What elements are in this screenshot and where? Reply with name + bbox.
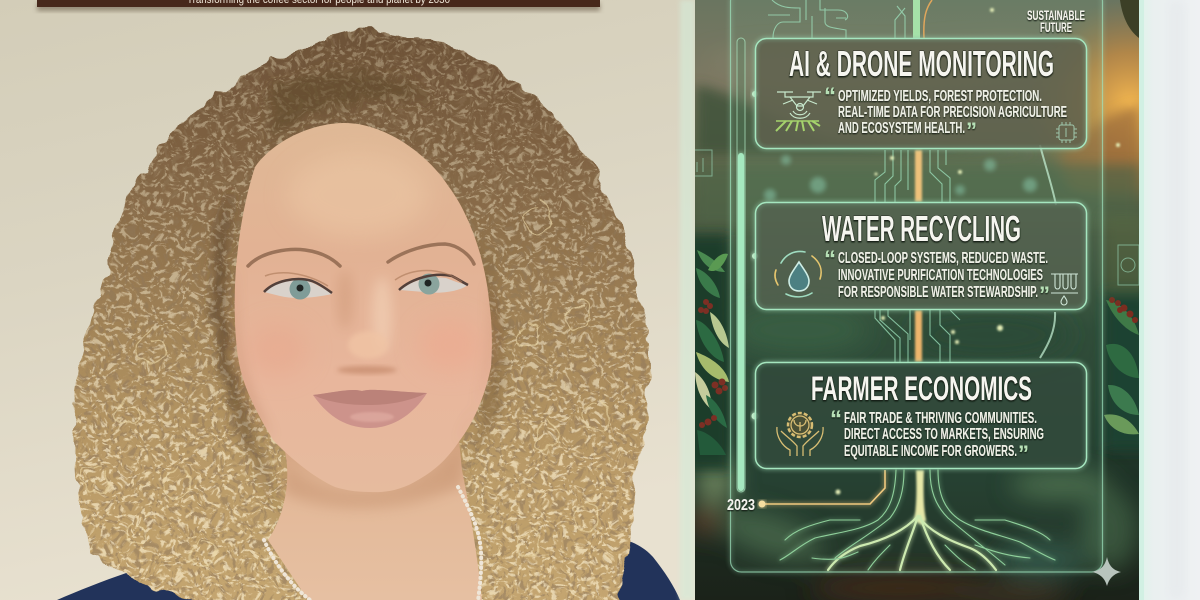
quote text: Water Recycling: “ xyxy=(824,246,836,273)
scene: dark leaf top right xyxy=(1120,0,1139,38)
quote text: AI & Drone: AND ECOSYSTEM HEALTH. xyxy=(838,120,965,137)
scene: sunset glow xyxy=(1048,10,1139,198)
scene: distant hills xyxy=(695,81,1139,204)
watermark: sparkle xyxy=(1092,557,1121,586)
scene: blurred foliage xyxy=(691,304,1138,600)
quote text: Water Recycling: CLOSED-LOOP SYSTEMS, REDUCED WASTE. xyxy=(838,250,1048,267)
quote text: Water Recycling: INNOVATIVE PURIFICATION TECHNOLOGIES xyxy=(838,267,1043,284)
icon: AI chip xyxy=(1056,122,1077,143)
quote text: Water Recycling: ” xyxy=(1039,282,1050,307)
portrait: clothing xyxy=(57,540,680,600)
quote text: Farmer Economics: DIRECT ACCESS TO MARKETS, ENSURING xyxy=(844,426,1044,443)
card: Farmer Economics xyxy=(756,362,1086,468)
scene: holographic side panels xyxy=(695,150,1139,285)
icon: drone over field xyxy=(776,92,821,131)
golden branch from 2023 xyxy=(763,470,885,504)
circuit traces xyxy=(768,0,960,362)
timeline nodes xyxy=(752,91,758,420)
glowing particles xyxy=(836,8,1120,494)
portrait: nose xyxy=(337,331,397,374)
label: Sustainable Future: FUTURE xyxy=(1040,20,1072,35)
portrait: eyebrows xyxy=(248,244,474,266)
portrait: pearl necklace xyxy=(264,487,481,600)
heading: Farmer Economics: FARMER ECONOMICS xyxy=(811,370,1032,408)
icon: water filtration xyxy=(1051,274,1078,305)
portrait: left eye xyxy=(264,273,332,300)
icon: hands holding gear xyxy=(777,413,823,456)
quote text: Farmer Economics: “ xyxy=(830,406,842,433)
banner: coffee sector strip xyxy=(37,0,600,11)
label: Sustainable Future xyxy=(1027,8,1085,35)
label: timeline start 2023: 2023 xyxy=(727,497,755,514)
quote text: Farmer Economics: ” xyxy=(1018,441,1029,466)
quote text: AI & Drone: OPTIMIZED YIELDS, FOREST PROTECTION. xyxy=(838,88,1042,105)
panel edge glow xyxy=(680,0,695,600)
quote text: AI & Drone: ” xyxy=(966,118,977,143)
timeline tube xyxy=(737,38,745,492)
portrait: loose curls xyxy=(81,200,609,568)
energy streak xyxy=(1040,145,1056,358)
scene: coffee plant right xyxy=(1103,228,1139,448)
quote text: Farmer Economics: FAIR TRADE & THRIVING COMMUNITIES. xyxy=(844,410,1037,427)
quote text: Water Recycling: FOR RESPONSIBLE WATER STEWARDSHIP. xyxy=(838,284,1038,301)
card: AI & Drone Monitoring xyxy=(756,38,1086,148)
portrait: right eye xyxy=(395,270,468,294)
quote text: AI & Drone: “ xyxy=(824,83,836,110)
portrait: curly hair xyxy=(74,31,649,600)
quote text: Farmer Economics: EQUITABLE INCOME FOR GROWERS. xyxy=(844,443,1017,460)
quote text: AI & Drone xyxy=(824,88,1068,135)
panel: gauze edge right xyxy=(1139,0,1200,600)
quote text: Farmer Economics xyxy=(830,406,1044,466)
frame: glass outline xyxy=(730,0,1102,572)
portrait: neck and chest xyxy=(268,430,482,600)
portrait: face xyxy=(233,123,494,492)
quote text: Water Recycling xyxy=(824,250,1050,299)
scene: bokeh lights xyxy=(764,155,1037,201)
heading: Water Recycling: WATER RECYCLING xyxy=(822,208,1021,249)
central trunk xyxy=(913,0,932,525)
card: Water Recycling xyxy=(756,202,1086,310)
scene: coffee plant left xyxy=(685,235,730,470)
icon: water recycle loop xyxy=(775,251,821,297)
label: Sustainable Future: SUSTAINABLE xyxy=(1027,8,1085,23)
portrait: lips xyxy=(313,390,427,428)
glowing roots xyxy=(780,470,1055,570)
panel: tech infographic scene xyxy=(695,0,1139,600)
timeline start dot xyxy=(758,500,766,508)
panel: portrait photo xyxy=(0,0,695,600)
